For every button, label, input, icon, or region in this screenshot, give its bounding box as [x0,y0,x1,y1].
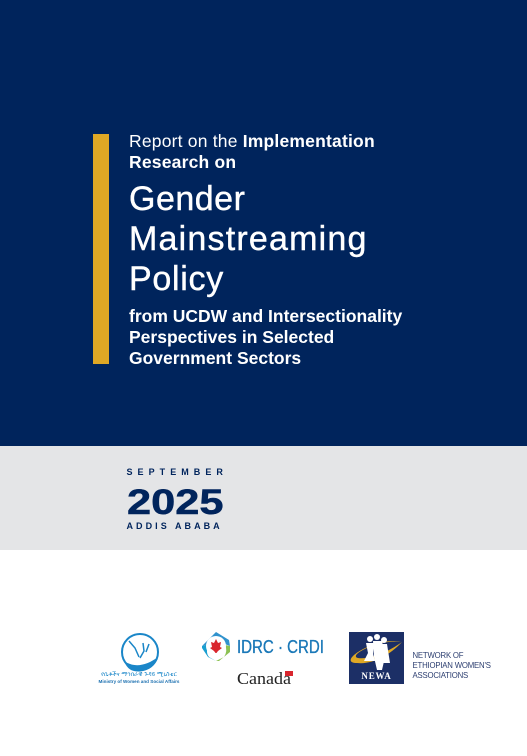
text: NEWA name: ASSOCIATIONS [412,671,468,680]
text: city: ADDIS ABABA [126,521,223,531]
text: NEWA name [412,651,491,680]
heading: main title: Policy [129,260,224,298]
heading: main title: Mainstreaming [129,220,368,258]
accent bar [93,134,109,364]
logo: Ministry of Women and Social Affairs: Ministry of Women and Social Affairs [99,679,180,684]
logo: Ministry of Women and Social Affairs: የሴቶችና ማኅበራዊ ጉዳይ ሚኒስቴር [101,671,178,678]
panel: navy cover background [0,0,527,446]
text: subtitle [129,306,402,368]
text: NEWA name: ETHIOPIAN WOMEN'S [412,661,491,670]
text: subtitle: Government Sectors [129,348,301,368]
text: year: 2025 [127,483,224,522]
heading: main title [129,180,368,298]
text: report intro: Research on [129,152,236,172]
text: report intro: Report on the Implementation [129,131,375,151]
logo: Ministry of Women and Social Affairs [98,633,180,684]
heading: main title: Gender [129,180,245,218]
logo: NEWA emblem [349,632,404,684]
text: month: SEPTEMBER [126,467,228,477]
logo: NEWA emblem: NEWA [361,671,392,681]
panel: date band [0,446,527,550]
text: report intro [129,131,375,172]
logo: IDRC CRDI and Canada [202,632,324,686]
text: NEWA name: NETWORK OF [412,651,463,660]
text: subtitle: from UCDW and Intersectionality [129,306,402,326]
text: subtitle: Perspectives in Selected [129,327,334,347]
